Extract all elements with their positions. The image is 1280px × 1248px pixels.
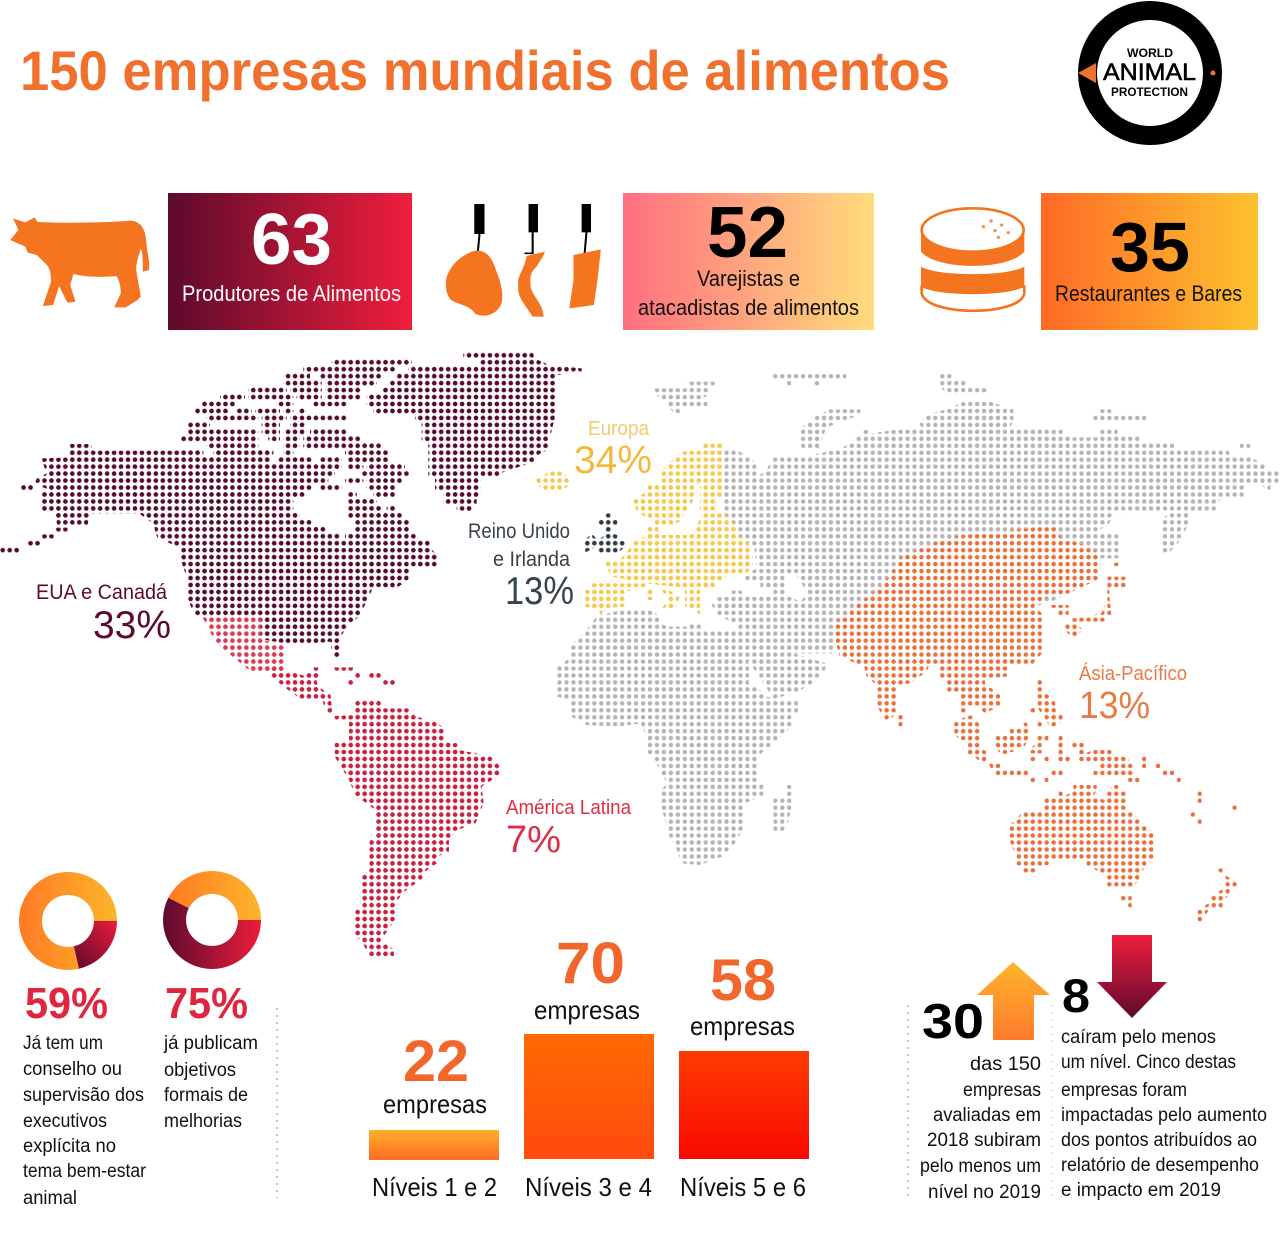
text block: 8 description: um nível. Cinco destas bbox=[1061, 1052, 1236, 1073]
label: Europa: Europa bbox=[588, 418, 650, 440]
bar: níveis 1 e 2: empresas bbox=[383, 1089, 487, 1119]
text block: 59% description: Já tem um bbox=[23, 1033, 103, 1054]
logo: World Animal Protection bbox=[1078, 10, 1216, 136]
map region: América Latina bbox=[268, 665, 500, 960]
stat: 75%: 75% bbox=[165, 979, 248, 1028]
label: Reino Unido e Irlanda: Reino Unido bbox=[468, 520, 570, 543]
panel: varejistas e atacadistas: atacadistas de alimentos bbox=[638, 295, 859, 320]
icon: burger bbox=[921, 208, 1024, 311]
panel: varejistas e atacadistas bbox=[623, 193, 874, 330]
text block: 75% description: melhorias bbox=[164, 1111, 242, 1132]
text block: 8 description: impactadas pelo aumento bbox=[1061, 1105, 1267, 1126]
text block: 30 description: 2018 subiram bbox=[927, 1130, 1041, 1151]
map region: Reino Unido e Irlanda bbox=[584, 513, 625, 553]
text block: 59% description: tema bem-estar bbox=[23, 1161, 147, 1182]
bar: níveis 3 e 4: Níveis 3 e 4 bbox=[525, 1172, 652, 1202]
logo: World Animal Protection: WORLD bbox=[1127, 48, 1173, 60]
label: Reino Unido e Irlanda: e Irlanda bbox=[493, 548, 570, 571]
label: EUA e Canadá: 33% bbox=[93, 604, 171, 647]
text block: 8 description: dos pontos atribuídos ao bbox=[1061, 1130, 1257, 1151]
panel: restaurantes e bares: Restaurantes e Bares bbox=[1055, 281, 1242, 306]
panel: produtores de alimentos: 63 bbox=[251, 200, 332, 280]
text block: 75% description: formais de bbox=[164, 1085, 248, 1106]
text block: 59% description: explícita no bbox=[23, 1136, 116, 1157]
bar: níveis 5 e 6: Níveis 5 e 6 bbox=[680, 1172, 806, 1202]
map region: EUA e Canadá bbox=[0, 350, 585, 662]
label: América Latina: 7% bbox=[506, 819, 561, 861]
text block: 8 description: relatório de desempenho bbox=[1061, 1155, 1259, 1176]
text block: 75% description bbox=[163, 1033, 258, 1132]
donut chart: 75% bbox=[163, 871, 261, 969]
bar: níveis 3 e 4 bbox=[524, 931, 654, 1202]
text block: 8 description bbox=[1061, 1027, 1267, 1201]
label: Reino Unido e Irlanda bbox=[468, 520, 574, 613]
label: Reino Unido e Irlanda: 13% bbox=[505, 570, 574, 613]
label: Europa: 34% bbox=[574, 439, 652, 482]
text block: 8 description: caíram pelo menos bbox=[1061, 1027, 1216, 1048]
logo: World Animal Protection: PROTECTION bbox=[1111, 87, 1188, 99]
logo: World Animal Protection: ANIMAL bbox=[1103, 59, 1196, 86]
label: EUA e Canadá bbox=[36, 581, 171, 647]
label: América Latina: América Latina bbox=[506, 797, 632, 819]
label: EUA e Canadá: EUA e Canadá bbox=[36, 581, 167, 604]
bar: níveis 1 e 2: Níveis 1 e 2 bbox=[372, 1172, 497, 1202]
stat: 8: 8 bbox=[1062, 969, 1090, 1022]
arrow: up bbox=[977, 962, 1050, 1040]
panel: restaurantes e bares bbox=[1041, 193, 1258, 330]
text block: 59% description: supervisão dos bbox=[23, 1085, 144, 1106]
world dot map bbox=[0, 350, 1280, 960]
label: Ásia-Pacífico: Ásia-Pacífico bbox=[1079, 662, 1187, 685]
text block: 59% description: conselho ou bbox=[23, 1059, 122, 1080]
bar: níveis 1 e 2: 22 bbox=[403, 1029, 469, 1094]
bar: níveis 3 e 4: 70 bbox=[556, 931, 625, 996]
map region: rest of world grey bbox=[555, 370, 1280, 870]
icon: cow bbox=[10, 217, 149, 307]
text block: 30 description: das 150 bbox=[970, 1054, 1041, 1075]
donut chart: 59% bbox=[19, 872, 117, 970]
panel: varejistas e atacadistas: 52 bbox=[707, 193, 788, 273]
panel: produtores de alimentos bbox=[168, 193, 412, 330]
text block: 59% description: animal bbox=[23, 1188, 77, 1209]
panel: produtores de alimentos: Produtores de Alimentos bbox=[182, 281, 401, 306]
panel: varejistas e atacadistas: Varejistas e bbox=[697, 266, 800, 291]
map region: Europa bbox=[535, 440, 765, 620]
text block: 75% description: objetivos bbox=[164, 1060, 236, 1081]
bar: níveis 5 e 6: empresas bbox=[690, 1011, 795, 1041]
bar: níveis 5 e 6 bbox=[679, 948, 809, 1202]
label: América Latina bbox=[506, 797, 632, 861]
map region: México bbox=[202, 617, 286, 671]
text block: 59% description bbox=[23, 1033, 147, 1209]
panel: restaurantes e bares: 35 bbox=[1110, 208, 1190, 286]
text block: 30 description: empresas bbox=[963, 1080, 1041, 1101]
bar: níveis 1 e 2 bbox=[369, 1029, 499, 1202]
bar: níveis 3 e 4: empresas bbox=[534, 995, 640, 1025]
title: 150 empresas mundiais de alimentos bbox=[20, 39, 950, 102]
text block: 59% description: executivos bbox=[23, 1111, 107, 1132]
bar: níveis 5 e 6: 58 bbox=[710, 948, 776, 1013]
label: Ásia-Pacífico: 13% bbox=[1079, 685, 1150, 727]
stat: 59%: 59% bbox=[25, 979, 108, 1028]
text block: 30 description: avaliadas em bbox=[933, 1105, 1041, 1126]
label: Europa bbox=[574, 418, 652, 482]
label: Ásia-Pacífico bbox=[1079, 662, 1187, 727]
text block: 30 description: nível no 2019 bbox=[928, 1182, 1041, 1203]
text block: 30 description bbox=[920, 1054, 1041, 1203]
arrow: down bbox=[1097, 935, 1167, 1018]
text block: 8 description: e impacto em 2019 bbox=[1061, 1180, 1221, 1201]
text block: 30 description: pelo menos um bbox=[920, 1156, 1041, 1177]
text block: 8 description: empresas foram bbox=[1061, 1080, 1187, 1101]
text block: 75% description: já publicam bbox=[163, 1033, 258, 1054]
icon: hanging meat cuts bbox=[446, 204, 601, 317]
map region: Ásia-Pacífico bbox=[830, 525, 1240, 925]
stat: 30: 30 bbox=[922, 995, 984, 1049]
